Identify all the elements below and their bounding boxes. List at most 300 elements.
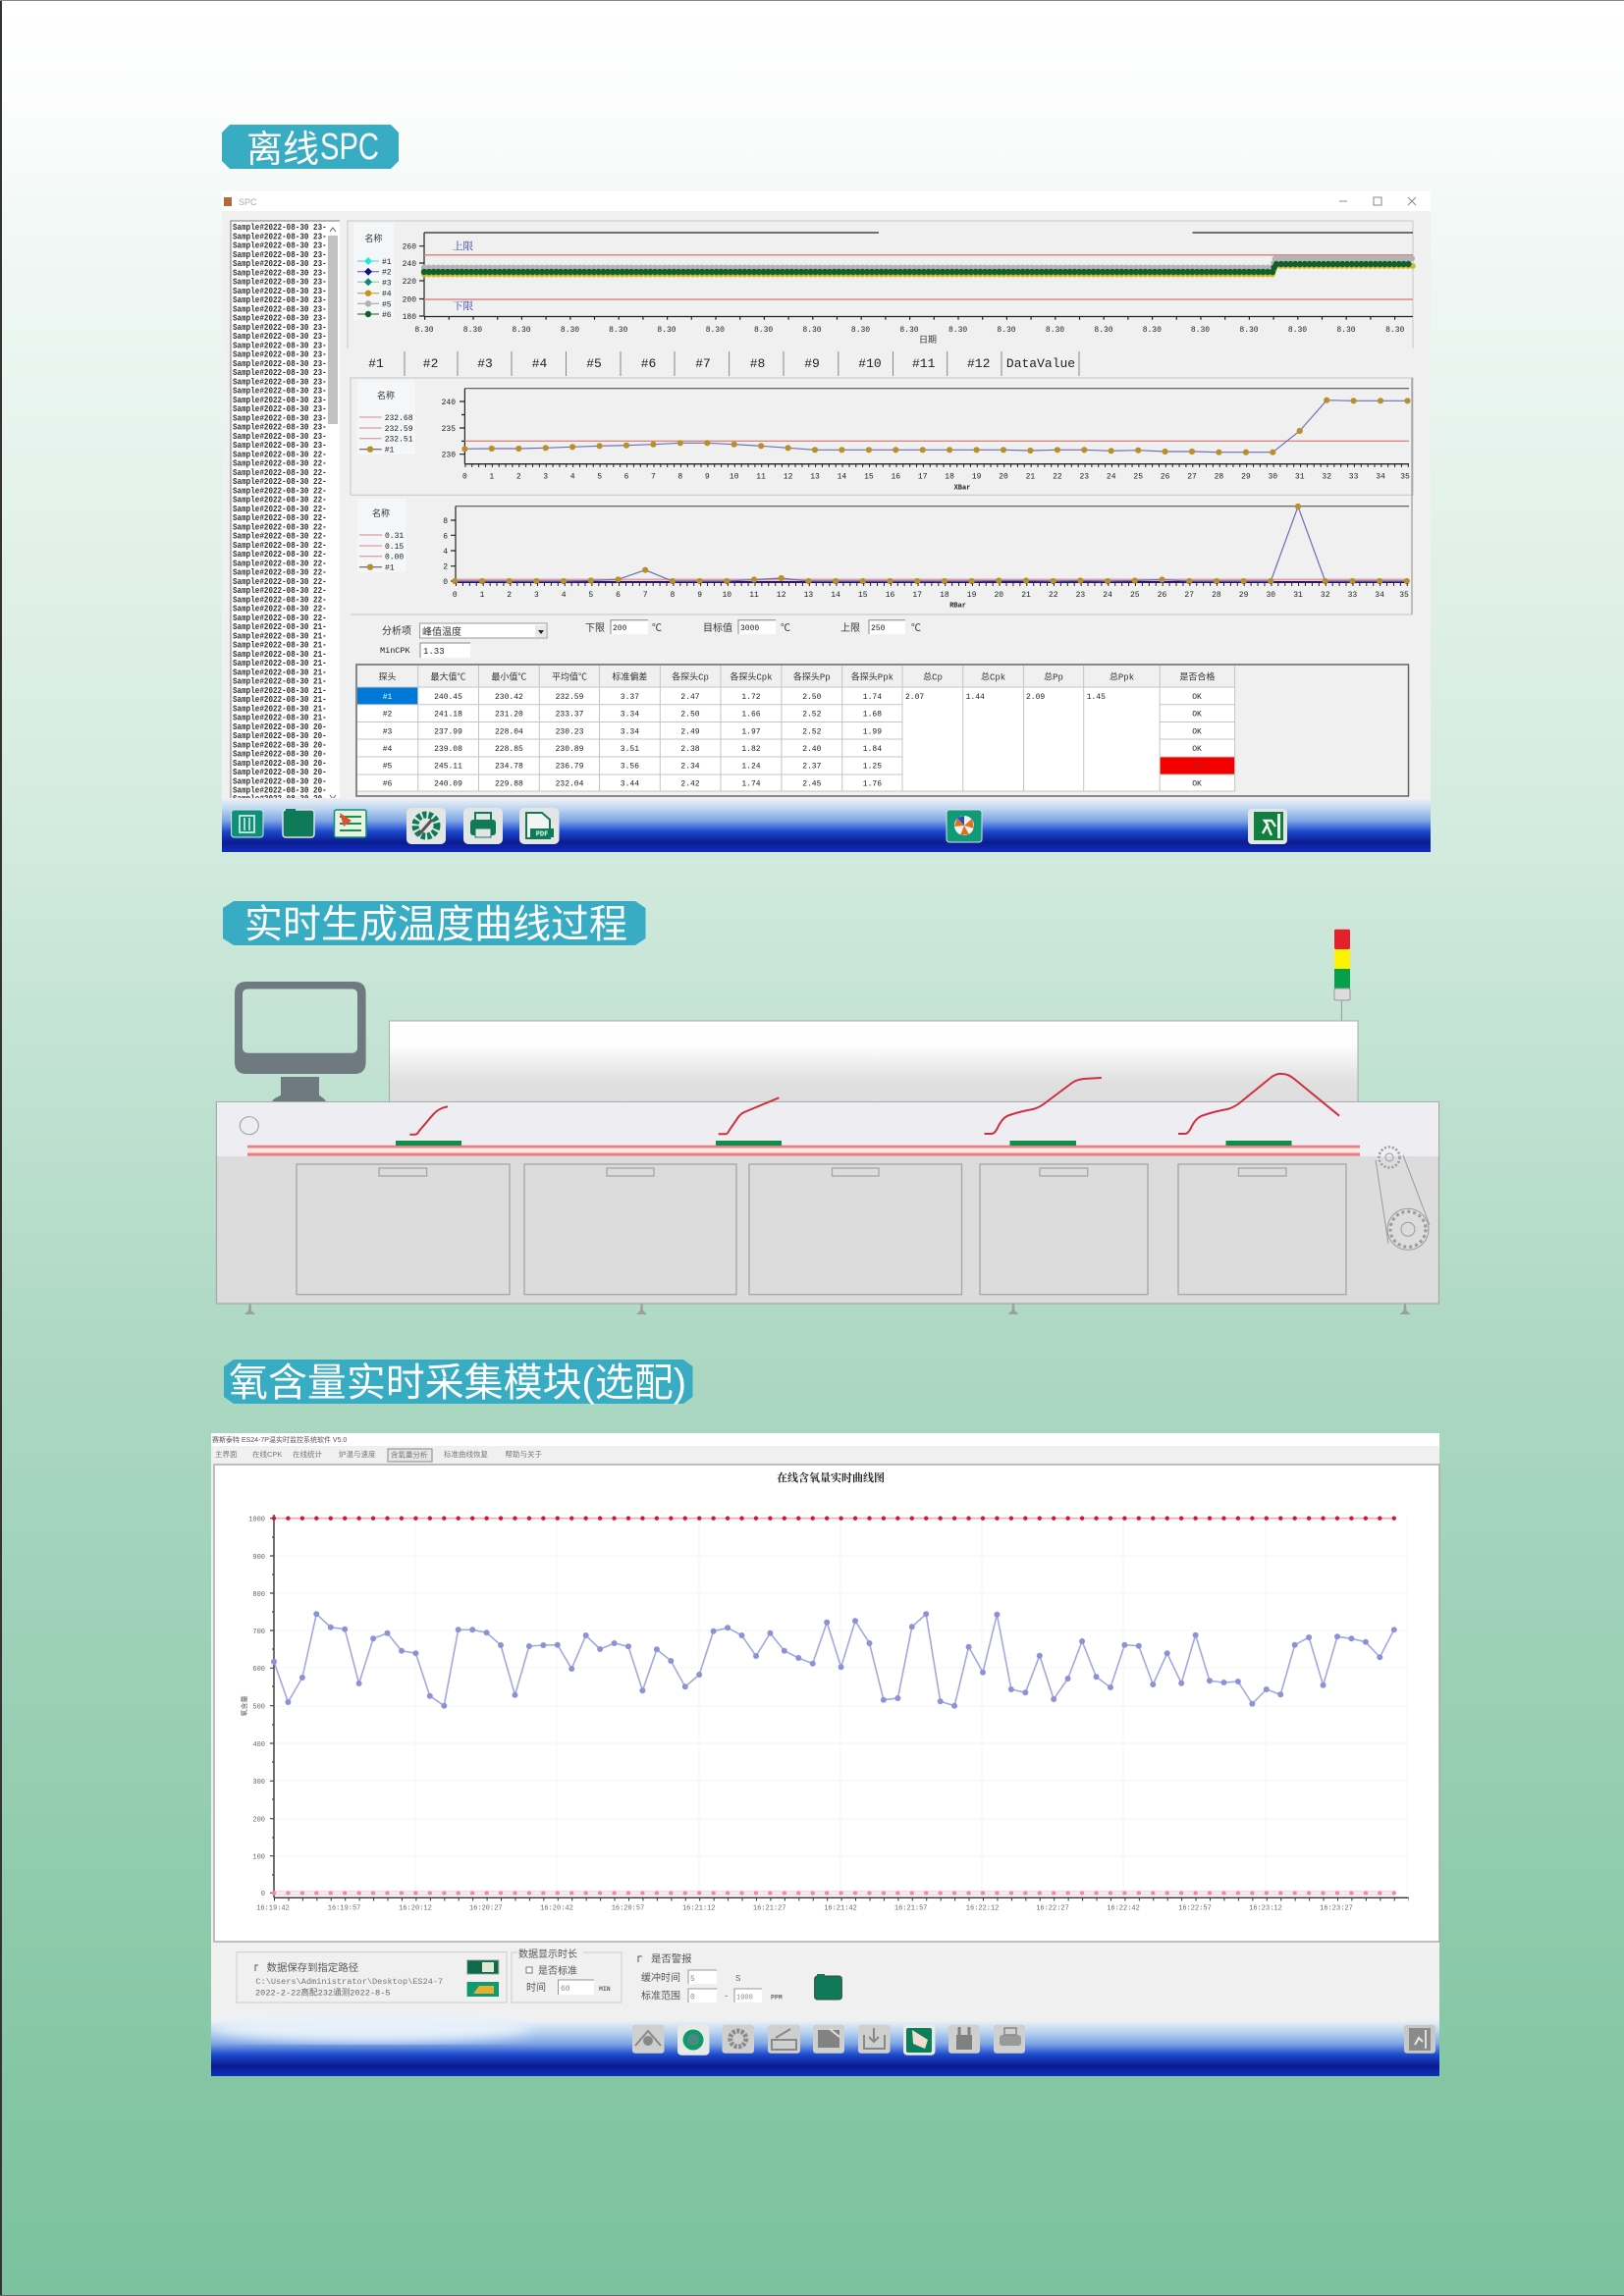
x axis: 8.30	[997, 326, 1016, 335]
XBar x axis: 9	[705, 473, 710, 481]
temperature curve 4	[1178, 1074, 1339, 1134]
group: alarm settings: -	[724, 1992, 729, 2002]
RBar x axis: 35	[1399, 591, 1409, 600]
sample list: Sample#2022-08-30 22-	[233, 486, 327, 497]
analysis controls: 1.33	[423, 647, 445, 657]
XBar x axis: 22	[1053, 473, 1062, 481]
tab strip: #10	[858, 356, 882, 371]
RBar x axis: 28	[1212, 591, 1221, 600]
table row #1: 1.74	[863, 693, 882, 702]
toolbar: blue gradient bar	[211, 2014, 1439, 2076]
RBar x axis: 22	[1049, 591, 1058, 600]
sample list: Sample#2022-08-30 23-	[233, 403, 327, 414]
sample list: Sample#2022-08-30 23-	[233, 349, 327, 360]
table row #1: 230.42	[495, 693, 523, 702]
group: data display duration: MIN	[599, 1986, 611, 1993]
table header: 各探头Pp	[793, 671, 831, 683]
x axis: 16:21:12	[682, 1904, 716, 1912]
sample list: Sample#2022-08-30 23-	[233, 240, 327, 251]
chart: RBar	[357, 499, 1409, 611]
XBar x axis: 29	[1241, 473, 1251, 481]
x axis: 8.30	[802, 326, 822, 335]
RBar x axis: 10	[722, 591, 731, 600]
RBar x axis: 4	[562, 591, 567, 600]
x axis: 16:23:12	[1249, 1904, 1282, 1912]
sample list: Sample#2022-08-30 20-	[233, 776, 327, 787]
sample list: Sample#2022-08-30 21-	[233, 621, 327, 632]
table header	[378, 671, 1215, 683]
legend: XBar: 名称	[377, 390, 395, 401]
chart: RBar: 8	[443, 517, 448, 526]
RBar x axis: 3	[534, 591, 539, 600]
analysis controls: ℃	[652, 623, 662, 635]
sample list: Sample#2022-08-30 22-	[233, 522, 327, 533]
x axis: 日期	[919, 335, 937, 346]
menu tabs: 在线统计	[293, 1449, 322, 1459]
sample list: Sample#2022-08-30 21-	[233, 658, 327, 668]
analysis controls: 200	[613, 624, 627, 633]
analysis controls: 上限	[840, 622, 860, 635]
table row #5: 2.34	[680, 763, 700, 772]
icon: disabled download	[858, 2025, 890, 2054]
table row #5: 1.24	[741, 763, 761, 772]
tab strip: #1	[368, 356, 384, 371]
table row #3: 3.34	[621, 727, 639, 736]
table row #6: #6	[383, 779, 392, 788]
boards on conveyor	[396, 1141, 1292, 1146]
temperature curve 2	[719, 1097, 779, 1134]
table row #3	[383, 727, 1202, 736]
legend: probes: 名称	[364, 233, 383, 244]
window title bar	[222, 191, 1431, 211]
icon: folder	[283, 809, 314, 837]
sample list: Sample#2022-08-30 23-	[233, 313, 327, 324]
tab strip: #6	[641, 356, 656, 371]
table row #1: 240.45	[434, 693, 462, 702]
x axis: 16:21:42	[824, 1904, 857, 1912]
XBar x axis	[462, 464, 1410, 493]
sample list	[231, 221, 340, 805]
icon: color wheel	[947, 810, 982, 842]
table header: 探头	[378, 671, 397, 683]
x axis: 16:22:27	[1036, 1904, 1069, 1912]
XBar x axis: XBar	[954, 485, 970, 493]
table header: 最小值℃	[491, 671, 526, 683]
table row #1: 2.50	[802, 693, 822, 702]
table row #2: #2	[383, 711, 392, 720]
XBar x axis: 32	[1322, 473, 1331, 481]
XBar x axis: 0	[462, 473, 467, 481]
table header: 是否合格	[1179, 671, 1215, 683]
x axis: 8.30	[463, 326, 482, 335]
legend: XBar: 232.51	[385, 436, 413, 445]
RBar x axis: 23	[1076, 591, 1085, 600]
oven hood	[389, 1021, 1358, 1102]
icon: disabled gear	[723, 2025, 754, 2054]
sample list: Sample#2022-08-30 23-	[233, 386, 327, 397]
table header: 标准偏差	[612, 671, 647, 683]
RBar x axis: 20	[994, 591, 1003, 600]
icon: disabled report	[813, 2025, 844, 2054]
sample list: Sample#2022-08-30 21-	[233, 649, 327, 660]
menu tabs: 主界面	[215, 1449, 238, 1459]
x axis: 16:19:42	[256, 1904, 290, 1912]
group: alarm settings: 缓冲时间	[641, 1971, 680, 1985]
RBar x axis: 9	[697, 591, 702, 600]
x axis: 8.30	[609, 326, 628, 335]
x axis: 8.30	[1239, 326, 1259, 335]
table row #4: #4	[383, 745, 392, 754]
chart: XBar	[351, 378, 1413, 614]
sample list: Sample#2022-08-30 20-	[233, 730, 327, 741]
tab strip: #3	[477, 356, 493, 371]
temperature curve 1	[409, 1106, 448, 1135]
heading: oxygen module: 氧含量实时采集模块(选配)	[229, 1362, 686, 1405]
menu tabs: 标准曲线恢复	[444, 1449, 488, 1459]
RBar x axis: 7	[643, 591, 648, 600]
sample list: Sample#2022-08-30 20-	[233, 749, 327, 760]
heading: real-time temperature curve: 实时生成温度曲线过程	[244, 903, 627, 946]
table row #1: 2.07	[905, 693, 924, 702]
sample list: Sample#2022-08-30 22-	[233, 458, 327, 469]
RBar x axis: 6	[616, 591, 621, 600]
x axis: 16:21:57	[894, 1904, 928, 1912]
upper limit line	[274, 1518, 1395, 1520]
y axis	[240, 1515, 274, 1898]
icon: disabled exit	[1404, 2025, 1435, 2054]
menu tabs	[215, 1449, 542, 1462]
XBar x axis: 34	[1376, 473, 1385, 481]
x axis: 8.30	[899, 326, 919, 335]
chart: RBar: 2	[443, 563, 448, 572]
XBar x axis: 20	[999, 473, 1008, 481]
RBar x axis: 32	[1321, 591, 1330, 600]
RBar x axis: 16	[886, 591, 894, 600]
limit lines: 上限	[453, 239, 473, 253]
analysis controls: 3000	[740, 624, 759, 633]
RBar x axis: 0	[453, 591, 458, 600]
RBar x axis: 30	[1266, 591, 1275, 600]
analysis controls: 分析项	[382, 624, 411, 638]
monitor	[235, 982, 366, 1101]
sample list: Sample#2022-08-30 20-	[233, 758, 327, 769]
legend: RBar: 名称	[372, 507, 390, 519]
table row #1: 1.45	[1087, 693, 1106, 702]
tab strip: #9	[804, 356, 820, 371]
legend: XBar	[357, 380, 415, 455]
sample list: Sample#2022-08-30 23-	[233, 358, 327, 369]
XBar x axis: 15	[864, 473, 874, 481]
y axis: 100	[252, 1853, 265, 1861]
XBar x axis: 2	[516, 473, 521, 481]
x axis: 16:22:57	[1178, 1904, 1212, 1912]
sample list: Sample#2022-08-30 22-	[233, 613, 327, 623]
sample list: Sample#2022-08-30 21-	[233, 667, 327, 678]
y axis: 900	[252, 1554, 265, 1562]
sample list: Sample#2022-08-30 22-	[233, 559, 327, 569]
sample list: Sample#2022-08-30 22-	[233, 585, 327, 596]
tab strip: #11	[912, 356, 936, 371]
limit lines	[424, 239, 1413, 313]
x axis: 16:23:27	[1320, 1904, 1353, 1912]
sample list: Sample#2022-08-30 23-	[233, 440, 327, 451]
chart: oxygen content	[214, 1465, 1439, 1942]
XBar x axis: 33	[1349, 473, 1359, 481]
sample list: Sample#2022-08-30 23-	[233, 286, 327, 296]
chart: all probes overview	[348, 221, 1413, 348]
table row #4: 228.85	[495, 745, 523, 754]
chart: RBar: 6	[443, 532, 448, 541]
XBar x axis: 6	[624, 473, 629, 481]
table row #2: 231.20	[495, 711, 523, 720]
x axis: 8.30	[948, 326, 967, 335]
table row #1: 2.09	[1026, 693, 1045, 702]
table row #6: 3.44	[621, 779, 639, 788]
RBar x axis: 5	[588, 591, 593, 600]
y axis: 180	[403, 313, 416, 322]
icon: settings gear	[406, 808, 446, 844]
conveyor rail	[247, 1146, 1360, 1156]
sample list: Sample#2022-08-30 20-	[233, 721, 327, 732]
indicator circle	[240, 1117, 258, 1135]
group: alarm settings: 标准范围	[641, 1989, 680, 2002]
XBar x axis: 14	[838, 473, 846, 481]
table row #6	[383, 779, 1202, 788]
XBar x axis: 5	[597, 473, 602, 481]
x axis: 8.30	[1336, 326, 1356, 335]
legend: probes: #4	[382, 291, 392, 299]
oxygen data series	[274, 1614, 1394, 1706]
XBar x axis: 3	[543, 473, 548, 481]
group: data display duration	[512, 1948, 622, 2002]
sample list: Sample#2022-08-30 23-	[233, 431, 327, 442]
sample list: Sample#2022-08-30 23-	[233, 249, 327, 260]
x axis: 8.30	[657, 326, 677, 335]
sample list: Sample#2022-08-30 22-	[233, 549, 327, 560]
table row #4	[383, 745, 1202, 754]
table row #3: 237.99	[434, 727, 462, 736]
y axis: 800	[252, 1591, 265, 1599]
XBar x axis: 4	[570, 473, 575, 481]
y axis: 0	[261, 1891, 265, 1898]
tab strip: DataValue	[1006, 356, 1075, 371]
table header: 各探头Cpk	[730, 671, 773, 683]
analysis controls: ℃	[911, 623, 921, 635]
signal tower	[1334, 930, 1350, 1021]
group: alarm settings: 1000	[736, 1995, 753, 2002]
XBar x axis: 17	[918, 473, 928, 481]
tab strip: #5	[586, 356, 602, 371]
chart title: 在线含氧量实时曲线图	[777, 1469, 885, 1485]
panel: oxygen monitoring window	[211, 1433, 1439, 2076]
XBar x axis: 12	[784, 473, 793, 481]
legend: RBar	[357, 499, 406, 573]
sample list: Sample#2022-08-30 20-	[233, 785, 327, 796]
XBar x axis: 16	[891, 473, 900, 481]
sample list: Sample#2022-08-30 21-	[233, 631, 327, 642]
table row #6: 1.76	[863, 779, 882, 788]
analysis controls: 峰值温度	[422, 625, 461, 639]
table row #2	[383, 711, 1202, 720]
RBar x axis: 26	[1158, 591, 1166, 600]
RBar line series	[455, 507, 1407, 581]
XBar x axis: 11	[756, 473, 766, 481]
table header: 最大值℃	[430, 671, 466, 683]
x axis: 8.30	[1143, 326, 1162, 335]
table row #4: 1.82	[741, 745, 761, 754]
temperature curve 3	[984, 1078, 1102, 1134]
table header: 各探头Ppk	[851, 671, 893, 683]
table row #1: 2.47	[680, 693, 700, 702]
RBar x axis: 31	[1293, 591, 1303, 600]
table header: 平均值℃	[552, 671, 587, 683]
y axis: 260	[403, 243, 416, 252]
XBar x axis: 8	[677, 473, 682, 481]
x axis	[414, 316, 1413, 346]
table row #5: 3.56	[621, 763, 639, 772]
analysis controls: MinCPK	[380, 646, 411, 656]
table row #2: 3.34	[621, 711, 639, 720]
y axis: 400	[252, 1741, 265, 1749]
legend: RBar: 0.00	[385, 554, 404, 562]
heading: offline SPC: SPC	[320, 127, 379, 168]
group: data display duration: 60	[561, 1985, 570, 1994]
group: alarm settings: 0	[690, 1993, 695, 2002]
group: data display duration: 时间	[526, 1981, 546, 1995]
RBar x axis: 19	[967, 591, 977, 600]
icon: export PDF	[519, 808, 560, 844]
window title: 赛斯泰特 ES24-7P温实时监控系统软件 V5.0	[212, 1435, 347, 1444]
sample list: Sample#2022-08-30 23-	[233, 304, 327, 315]
menu tabs: 含氧量分析	[391, 1449, 428, 1459]
y axis: 200	[403, 296, 416, 304]
illustration: reflow oven	[216, 930, 1439, 1314]
y axis: 220	[403, 278, 416, 287]
XBar x axis: 10	[730, 473, 739, 481]
RBar x axis	[453, 585, 1409, 611]
icon: disabled printer	[994, 2025, 1025, 2054]
XBar x axis: 19	[972, 473, 982, 481]
y axis: 300	[252, 1779, 265, 1787]
group: data display duration: 是否标准	[538, 1965, 577, 1978]
sample list: Sample#2022-08-30 23-	[233, 395, 327, 405]
x axis: 8.30	[1094, 326, 1113, 335]
group: data save path	[237, 1952, 507, 2002]
table row #5: 234.78	[495, 763, 523, 772]
icon: disabled home	[632, 2025, 664, 2054]
chart: XBar: 230	[442, 452, 456, 460]
RBar x axis: 18	[940, 591, 949, 600]
x axis: 8.30	[512, 326, 531, 335]
data table	[356, 665, 1408, 796]
table row #5: 1.25	[863, 763, 882, 772]
RBar x axis: 21	[1021, 591, 1031, 600]
icon: open folder	[467, 1982, 499, 1997]
table row #3: 228.04	[495, 727, 523, 736]
group: alarm settings	[638, 1952, 841, 2002]
x axis	[256, 1897, 1409, 1912]
icon: disabled chart	[768, 2025, 800, 2054]
legend: probes: #5	[382, 300, 392, 309]
feet	[244, 1304, 1410, 1314]
XBar x axis: 26	[1161, 473, 1170, 481]
analysis controls: 目标值	[703, 621, 732, 635]
x axis: 16:19:57	[328, 1904, 360, 1912]
tab strip: #4	[532, 356, 547, 371]
legend: XBar: #1	[385, 447, 395, 455]
menu tabs: 帮助与关于	[505, 1449, 542, 1459]
sample list: Sample#2022-08-30 23-	[233, 222, 327, 233]
legend: RBar: #1	[385, 564, 395, 573]
y axis: 600	[252, 1666, 265, 1674]
group: alarm settings: 5	[690, 1975, 695, 1984]
table header: 总Cpk	[981, 671, 1005, 683]
RBar x axis: 12	[777, 591, 786, 600]
y axis: 700	[252, 1629, 265, 1636]
sample list: Sample#2022-08-30 20-	[233, 767, 327, 777]
table row #4: 2.38	[680, 745, 700, 754]
tab strip: #7	[695, 356, 711, 371]
sample list: Sample#2022-08-30 23-	[233, 294, 327, 305]
RBar x axis: 11	[749, 591, 759, 600]
sample list: Sample#2022-08-30 22-	[233, 450, 327, 460]
sample list: Sample#2022-08-30 23-	[233, 377, 327, 388]
table row #5: NG	[1192, 763, 1202, 772]
sample list: Sample#2022-08-30 22-	[233, 504, 327, 514]
sample list: Sample#2022-08-30 23-	[233, 232, 327, 242]
RBar x axis: 29	[1239, 591, 1249, 600]
table row #4: 3.51	[621, 745, 639, 754]
table header: 各探头Cp	[672, 671, 709, 683]
x axis: 8.30	[1385, 326, 1405, 335]
lower limit line	[274, 1892, 1395, 1895]
sample list: Sample#2022-08-30 21-	[233, 640, 327, 651]
y axis: 500	[252, 1704, 265, 1712]
XBar x axis: 31	[1295, 473, 1305, 481]
XBar x axis: 27	[1187, 473, 1197, 481]
table row #1: 232.59	[556, 693, 584, 702]
legend: probes: #2	[382, 269, 392, 278]
chart: RBar: 4	[443, 548, 448, 557]
table row #3: 230.23	[556, 727, 584, 736]
x axis: 8.30	[754, 326, 773, 335]
group: alarm settings: S	[735, 1974, 740, 1984]
table row #2: 1.66	[741, 711, 761, 720]
RBar x axis: 17	[912, 591, 922, 600]
RBar x axis: 14	[831, 591, 840, 600]
x axis: 8.30	[414, 326, 434, 335]
table row #5: #5	[383, 763, 392, 772]
sample list: Sample#2022-08-30 21-	[233, 704, 327, 715]
legend: XBar: 232.68	[385, 414, 413, 423]
table row #6: 2.42	[680, 779, 700, 788]
sample list: Sample#2022-08-30 23-	[233, 277, 327, 288]
RBar x axis: 27	[1184, 591, 1194, 600]
x axis: 16:20:27	[469, 1904, 503, 1912]
table row #5: 2.37	[802, 763, 822, 772]
sample list: Sample#2022-08-30 23-	[233, 413, 327, 424]
RBar x axis: 33	[1348, 591, 1357, 600]
x axis: 16:20:42	[540, 1904, 573, 1912]
table row #6: 229.88	[495, 779, 523, 788]
icon: save location	[467, 1960, 499, 1974]
RBar x axis: 15	[858, 591, 868, 600]
RBar x axis: 1	[480, 591, 485, 600]
table row #6: 232.04	[556, 779, 584, 788]
x axis: 16:22:42	[1107, 1904, 1140, 1912]
table row #1: OK	[1192, 693, 1202, 702]
table row #1: 1.44	[966, 693, 985, 702]
